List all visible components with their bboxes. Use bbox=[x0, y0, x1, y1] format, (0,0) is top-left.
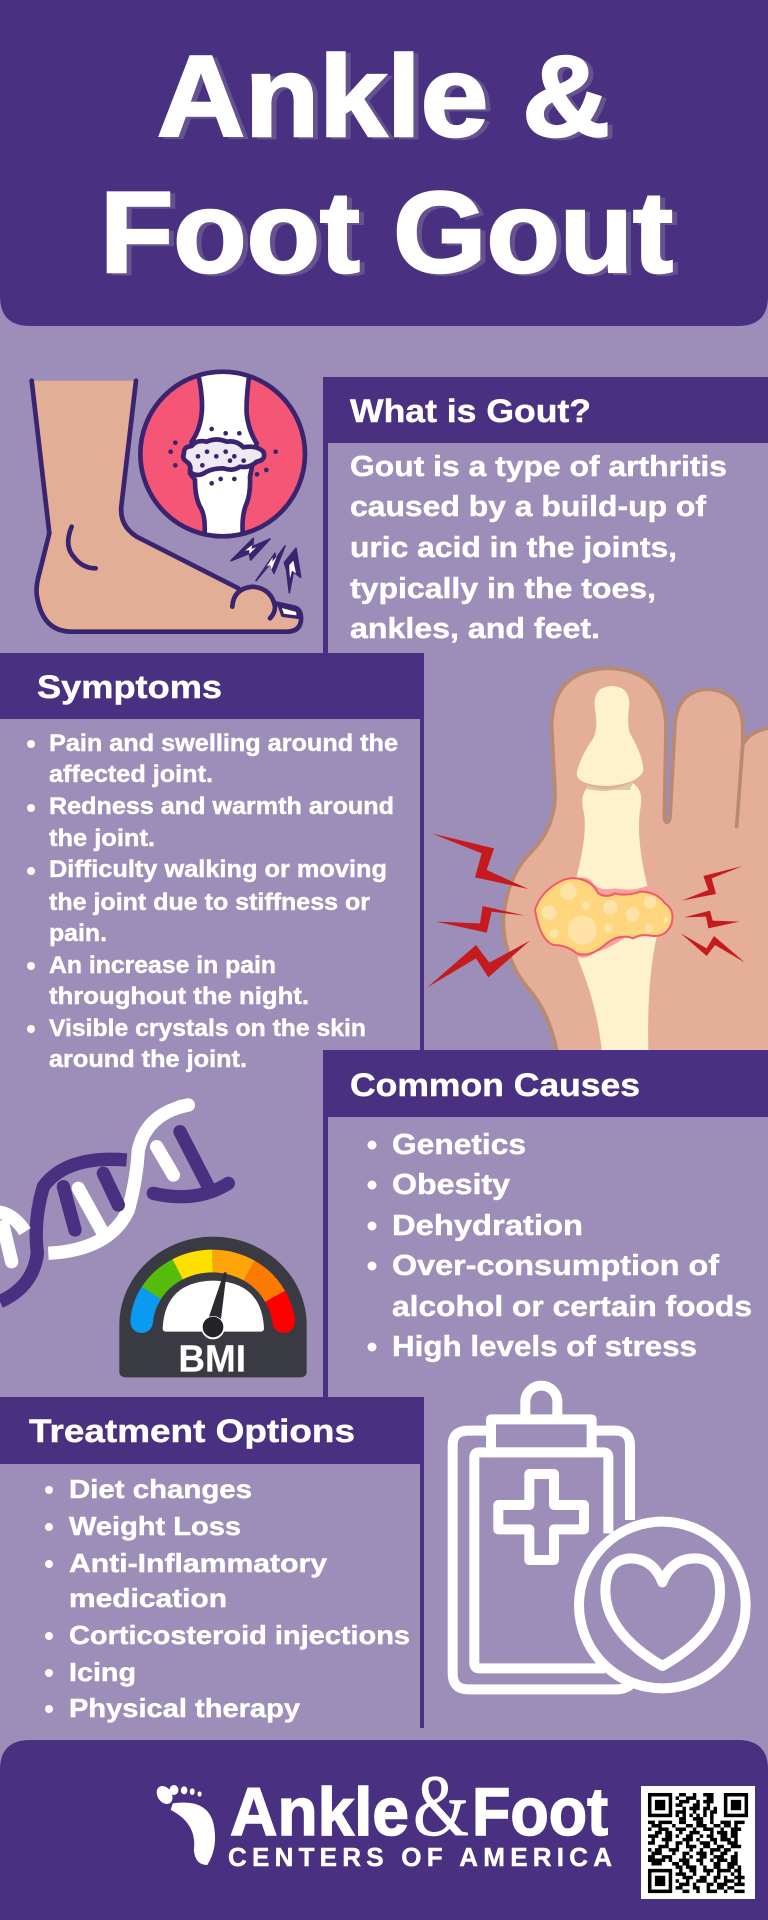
body text bbox=[350, 451, 727, 645]
heading: What is Gout? bbox=[350, 393, 591, 429]
logo: CENTERS OF AMERICA bbox=[228, 1842, 612, 1872]
panel: symptoms bbox=[0, 653, 424, 1073]
treatment list: Icing bbox=[69, 1657, 136, 1687]
symptoms list: the joint. bbox=[49, 825, 155, 852]
uric acid crystal bbox=[535, 877, 673, 958]
needle bbox=[201, 1272, 227, 1339]
symptoms list: pain. bbox=[49, 920, 107, 947]
illustration: dna helix bbox=[0, 1105, 228, 1302]
panel: treatment options bbox=[0, 1397, 424, 1728]
title: Ankle & bbox=[157, 33, 610, 161]
symptoms list: Difficulty walking or moving bbox=[49, 856, 387, 883]
symptoms list: around the joint. bbox=[49, 1046, 247, 1073]
causes list: High levels of stress bbox=[392, 1331, 697, 1363]
qr code bbox=[641, 1786, 755, 1899]
foot shape bbox=[33, 381, 301, 632]
causes list: Over-consumption of bbox=[392, 1250, 719, 1282]
logo: Foot bbox=[472, 1774, 608, 1850]
causes list: Obesity bbox=[392, 1169, 510, 1201]
logo foot mark bbox=[154, 1784, 215, 1865]
causes list: Dehydration bbox=[392, 1210, 583, 1242]
gauge arc bbox=[142, 1261, 284, 1322]
dial face bbox=[163, 1281, 264, 1332]
symptoms list: Redness and warmth around bbox=[49, 793, 394, 820]
treatment list: Anti-Inflammatory bbox=[69, 1548, 328, 1578]
title bbox=[100, 33, 673, 297]
symptoms list: throughout the night. bbox=[49, 983, 309, 1010]
symptoms list: affected joint. bbox=[49, 761, 213, 788]
treatment list: Diet changes bbox=[69, 1474, 252, 1504]
causes list: alcohol or certain foods bbox=[392, 1291, 752, 1323]
logo: Ankle bbox=[230, 1774, 409, 1850]
logo bbox=[154, 1758, 612, 1872]
pain bolts bbox=[427, 833, 745, 987]
logo: & bbox=[413, 1758, 469, 1855]
joint circle bbox=[140, 370, 305, 540]
body text: caused by a build-up of bbox=[350, 491, 706, 523]
causes list bbox=[368, 1129, 752, 1363]
symptoms list: Pain and swelling around the bbox=[49, 730, 398, 757]
heading: Common Causes bbox=[350, 1067, 640, 1103]
panel: common causes bbox=[323, 1050, 768, 1397]
title: Foot Gout bbox=[100, 169, 673, 297]
toe bones bbox=[577, 686, 657, 1050]
symptoms list: An increase in pain bbox=[49, 952, 276, 979]
foot and toes bbox=[503, 668, 768, 1055]
pain sparks bbox=[231, 538, 301, 593]
treatment list bbox=[45, 1474, 410, 1723]
body text: uric acid in the joints, bbox=[350, 532, 677, 564]
treatment list: medication bbox=[69, 1583, 227, 1613]
symptoms list bbox=[27, 730, 398, 1073]
footer banner bbox=[0, 1740, 768, 1920]
causes list: Genetics bbox=[392, 1129, 526, 1161]
icon: clipboard with heart bbox=[453, 1386, 746, 1689]
heading: Treatment Options bbox=[29, 1413, 355, 1449]
symptoms list: Visible crystals on the skin bbox=[49, 1015, 366, 1042]
body text: Gout is a type of arthritis bbox=[350, 451, 727, 483]
treatment list: Weight Loss bbox=[69, 1511, 241, 1541]
treatment list: Physical therapy bbox=[69, 1693, 301, 1723]
icon: bmi gauge bbox=[119, 1237, 307, 1381]
treatment list: Corticosteroid injections bbox=[69, 1620, 410, 1650]
symptoms list: the joint due to stiffness or bbox=[49, 889, 370, 916]
illustration: foot with gout joint bbox=[32, 370, 305, 632]
illustration: inflamed toe joint bbox=[427, 668, 768, 1055]
body text: ankles, and feet. bbox=[350, 613, 600, 645]
panel: what is gout bbox=[323, 377, 768, 653]
icon: bmi gauge: BMI bbox=[178, 1338, 246, 1381]
body text: typically in the toes, bbox=[350, 573, 656, 605]
heading: Symptoms bbox=[37, 669, 222, 705]
foot outline bbox=[32, 381, 301, 632]
header banner bbox=[0, 0, 768, 326]
